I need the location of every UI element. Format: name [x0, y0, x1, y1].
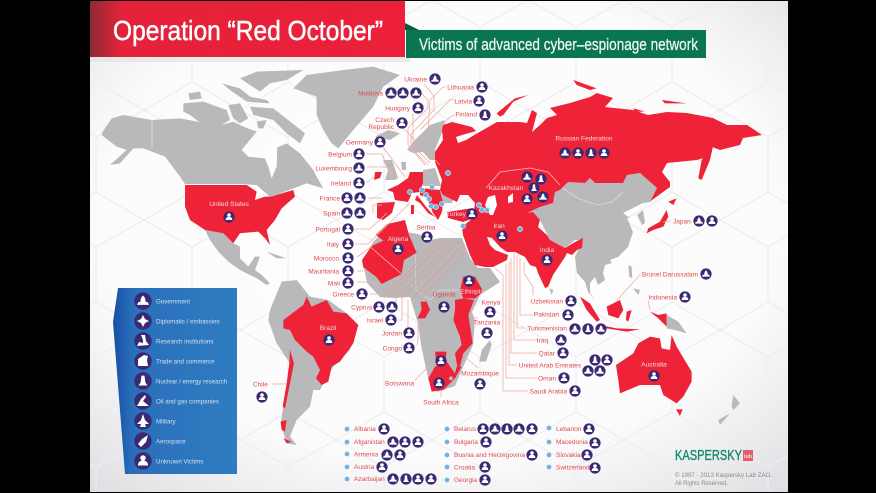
Mali — [328, 277, 354, 289]
Korea — [637, 210, 645, 225]
Mozambique — [461, 370, 499, 390]
Croatia: Croatia — [454, 464, 475, 472]
Morocco: Morocco — [314, 256, 339, 262]
Cyprus: Cyprus — [351, 304, 373, 312]
Belgium — [328, 148, 365, 160]
Ireland — [331, 177, 365, 189]
Africa hatching — [383, 240, 466, 297]
Algeria: Algeria — [388, 236, 409, 243]
copyright text — [675, 472, 772, 487]
United Arab Emirates: United Arab Emirates — [519, 362, 582, 370]
Kaspersky logo: KASPERSKY — [675, 447, 742, 464]
Mozambique: Mozambique — [461, 370, 499, 378]
Czech Republic — [368, 117, 408, 131]
Belgium: Belgium — [328, 152, 353, 158]
Albania — [344, 423, 390, 435]
legend: Oil and gas companies — [134, 392, 219, 410]
Saudi Arabia — [530, 385, 581, 397]
country borders — [486, 168, 560, 188]
Finland: Finland — [455, 112, 477, 118]
Serbia — [416, 224, 436, 243]
Lebanon — [546, 423, 595, 435]
header: title banner: Operation “Red October” — [113, 15, 383, 46]
Hungary — [385, 102, 424, 114]
Kenya: Kenya — [482, 300, 501, 306]
Kazakhstan: Kazakhstan — [489, 185, 524, 192]
legend panel — [113, 288, 237, 474]
Israel — [367, 314, 397, 326]
Latvia: Latvia — [454, 98, 472, 106]
Austria — [344, 461, 388, 473]
Tanzania: Tanzania — [474, 320, 501, 326]
Tanzania — [474, 320, 501, 339]
Japan: Japan — [673, 218, 691, 226]
Czech Republic: Czech — [375, 117, 394, 124]
Oman: Oman — [538, 376, 556, 382]
Slovakia: Slovakia — [556, 452, 581, 459]
China and Southeast Asia — [527, 173, 657, 300]
Slovakia — [546, 449, 593, 461]
Ukraine — [404, 73, 441, 85]
legend: Aerospace — [134, 432, 186, 450]
Russian Federation: Russian Federation — [555, 136, 613, 142]
legend: Diplomatic / embassies — [134, 312, 220, 330]
numbered markers on map — [407, 170, 523, 232]
Mauritania: Mauritania — [308, 268, 339, 276]
Congo: Congo — [383, 346, 402, 352]
Brazil: Brazil — [320, 325, 337, 332]
bottom country list — [344, 423, 601, 486]
Pakistan — [534, 309, 574, 321]
Mali: Mali — [328, 280, 341, 288]
Lebanon: Lebanon — [556, 426, 582, 433]
Macedonia: Macedonia — [556, 439, 588, 446]
Armenia — [344, 449, 406, 461]
Brunei Darussalam: Brunei Darussalam — [642, 272, 698, 278]
Spain: Spain — [323, 210, 340, 218]
legend: Government — [134, 292, 190, 310]
United States — [209, 201, 249, 223]
Afganistan — [344, 436, 424, 448]
Uzbekistan — [530, 295, 577, 307]
Turkey: Turkey — [446, 211, 467, 218]
Georgia: Georgia — [454, 477, 478, 484]
Botswana: Botswana — [385, 380, 414, 388]
United States — [185, 185, 295, 245]
Portugal — [315, 223, 354, 235]
Iran — [493, 223, 508, 242]
Spain — [323, 207, 366, 219]
header: green subtitle — [405, 23, 706, 58]
Germany — [346, 136, 386, 148]
Macedonia — [546, 437, 601, 449]
Luxembourg — [315, 162, 365, 174]
legend: Government: Government — [156, 298, 190, 306]
Lithuania — [447, 81, 488, 93]
Botswana — [385, 355, 447, 388]
Turkmenistan: Turkmenistan — [527, 326, 567, 332]
Greece: Greece — [332, 292, 354, 298]
Iran: Iran — [493, 223, 505, 230]
Ukraine: Ukraine — [404, 76, 427, 84]
South Africa: South Africa — [423, 400, 459, 406]
Armenia: Armenia — [354, 452, 379, 458]
Australia: Australia — [641, 362, 667, 368]
legend: Trade and commerce: Trade and commerce — [156, 358, 215, 366]
Africa — [363, 232, 500, 392]
legend: Nuclear / energy research: Nuclear / energy research — [156, 378, 228, 386]
Germany: Germany — [346, 140, 374, 146]
Belarus — [444, 423, 538, 435]
Russia, Central Asia and Middle East — [435, 93, 762, 288]
Iraq — [537, 334, 567, 346]
Uganda — [432, 292, 456, 313]
India: India — [540, 247, 554, 254]
United Arab Emirates — [519, 354, 613, 377]
Oman — [538, 372, 570, 384]
legend: Aerospace: Aerospace — [156, 438, 186, 446]
connector lines — [272, 84, 671, 397]
Hungary: Hungary — [385, 106, 411, 112]
Czech Republic: Republic — [368, 124, 395, 131]
Qatar: Qatar — [538, 350, 556, 358]
Turkey — [447, 208, 477, 222]
Brunei Darussalam — [642, 268, 712, 280]
Ireland: Ireland — [331, 180, 351, 188]
France — [319, 192, 366, 204]
South America — [268, 280, 358, 445]
Portugal: Portugal — [315, 226, 341, 234]
Italy — [327, 238, 354, 250]
Turkmenistan — [527, 323, 607, 335]
East and South Africa red — [417, 277, 492, 392]
Brazil — [320, 325, 337, 346]
Indonesia, Australia, Oceania — [549, 265, 740, 425]
Lithuania: Lithuania — [447, 84, 474, 92]
South Africa — [423, 377, 459, 406]
Alaska border — [151, 120, 153, 148]
Israel: Israel — [367, 318, 384, 324]
Qatar — [538, 347, 569, 359]
Latvia — [454, 95, 485, 107]
Italy: Italy — [327, 242, 340, 248]
legend: Military: Military — [156, 418, 176, 426]
copyright text: All Rights Reserved. — [675, 480, 728, 487]
Indonesia: Indonesia — [648, 294, 677, 302]
Russian Federation — [555, 136, 613, 159]
Kazakhstan — [489, 171, 549, 205]
Russian arctic islands, Sakhalin and Japan — [497, 80, 713, 233]
North America landmass — [102, 70, 323, 198]
Mauritania — [308, 265, 354, 277]
Saudi Arabia: Saudi Arabia — [530, 388, 567, 396]
Finland — [455, 109, 491, 121]
Afganistan: Afganistan — [354, 439, 385, 446]
legend: Research institutions — [134, 332, 213, 350]
Moldova: Moldova — [358, 90, 383, 98]
Switzerland: Switzerland — [556, 464, 590, 472]
Kaspersky logo: lab — [744, 454, 752, 460]
Pakistan: Pakistan — [534, 312, 559, 318]
Algeria — [388, 236, 409, 255]
Bulgaria — [444, 436, 492, 448]
Iraq: Iraq — [537, 338, 548, 344]
France: France — [319, 196, 340, 202]
Caspian and Aral seas — [485, 193, 513, 215]
Turkey — [446, 208, 478, 220]
Cyprus — [351, 301, 398, 313]
header: green subtitle: Victims of advanced cyber–espionage network — [419, 35, 698, 54]
Georgia — [444, 474, 491, 486]
Greece — [332, 288, 368, 300]
Europe gray countries — [383, 120, 455, 203]
Morocco — [314, 252, 354, 264]
Ethiopia — [460, 275, 484, 296]
world map — [102, 67, 762, 445]
background panel — [90, 1, 788, 492]
Japan — [673, 215, 718, 227]
Azarbaijan: Azarbaijan — [354, 476, 385, 483]
Chile — [253, 382, 268, 403]
Indonesia — [648, 291, 691, 303]
Croatia — [444, 461, 491, 473]
country labels and icons: Europe — [308, 73, 491, 354]
Africa borders — [415, 245, 465, 300]
Ethiopia: Ethiopia — [460, 288, 484, 296]
copyright text: © 1997 - 2013 Kaspersky Lab ZAO. — [675, 472, 772, 479]
Jordan — [382, 327, 415, 339]
Europe red countries — [374, 172, 443, 220]
Jordan: Jordan — [382, 330, 402, 338]
legend: Nuclear / energy research — [134, 372, 228, 390]
on-map labels and icons — [209, 136, 718, 406]
Switzerland — [546, 462, 601, 474]
Kenya — [482, 300, 501, 318]
Asia gray borders — [563, 188, 623, 205]
Greenland, Iceland, Mexico, Cuba — [205, 67, 400, 285]
legend: Diplomatic / embassies: Diplomatic / embassies — [156, 318, 220, 326]
header: title banner — [90, 1, 405, 57]
legend: Unknown Victims: Unknown Victims — [156, 458, 203, 466]
legend: Military — [134, 412, 176, 430]
United States: United States — [209, 201, 249, 208]
Chile: Chile — [253, 382, 268, 388]
Asia label list — [519, 268, 712, 397]
Bosnia and Herzegovina — [444, 449, 538, 461]
Moldova — [358, 87, 422, 99]
Uzbekistan: Uzbekistan — [530, 298, 563, 306]
North Africa red — [362, 220, 417, 284]
Uganda: Uganda — [432, 292, 456, 298]
legend: Research institutions: Research institutions — [156, 338, 213, 346]
legend: Trade and commerce — [134, 352, 215, 370]
Albania: Albania — [354, 426, 376, 433]
legend: Oil and gas companies: Oil and gas companies — [156, 398, 219, 406]
legend: Unknown Victims — [134, 452, 203, 470]
Belarus: Belarus — [454, 426, 477, 433]
Bulgaria: Bulgaria — [454, 439, 478, 446]
Bosnia and Herzegovina: Bosnia and Herzegovina — [454, 452, 525, 459]
Congo — [383, 342, 415, 354]
Austria: Austria — [354, 464, 375, 471]
Luxembourg: Luxembourg — [315, 166, 352, 172]
Australia — [641, 362, 667, 382]
Azarbaijan — [344, 473, 437, 485]
India — [540, 247, 554, 266]
Serbia: Serbia — [416, 224, 436, 232]
